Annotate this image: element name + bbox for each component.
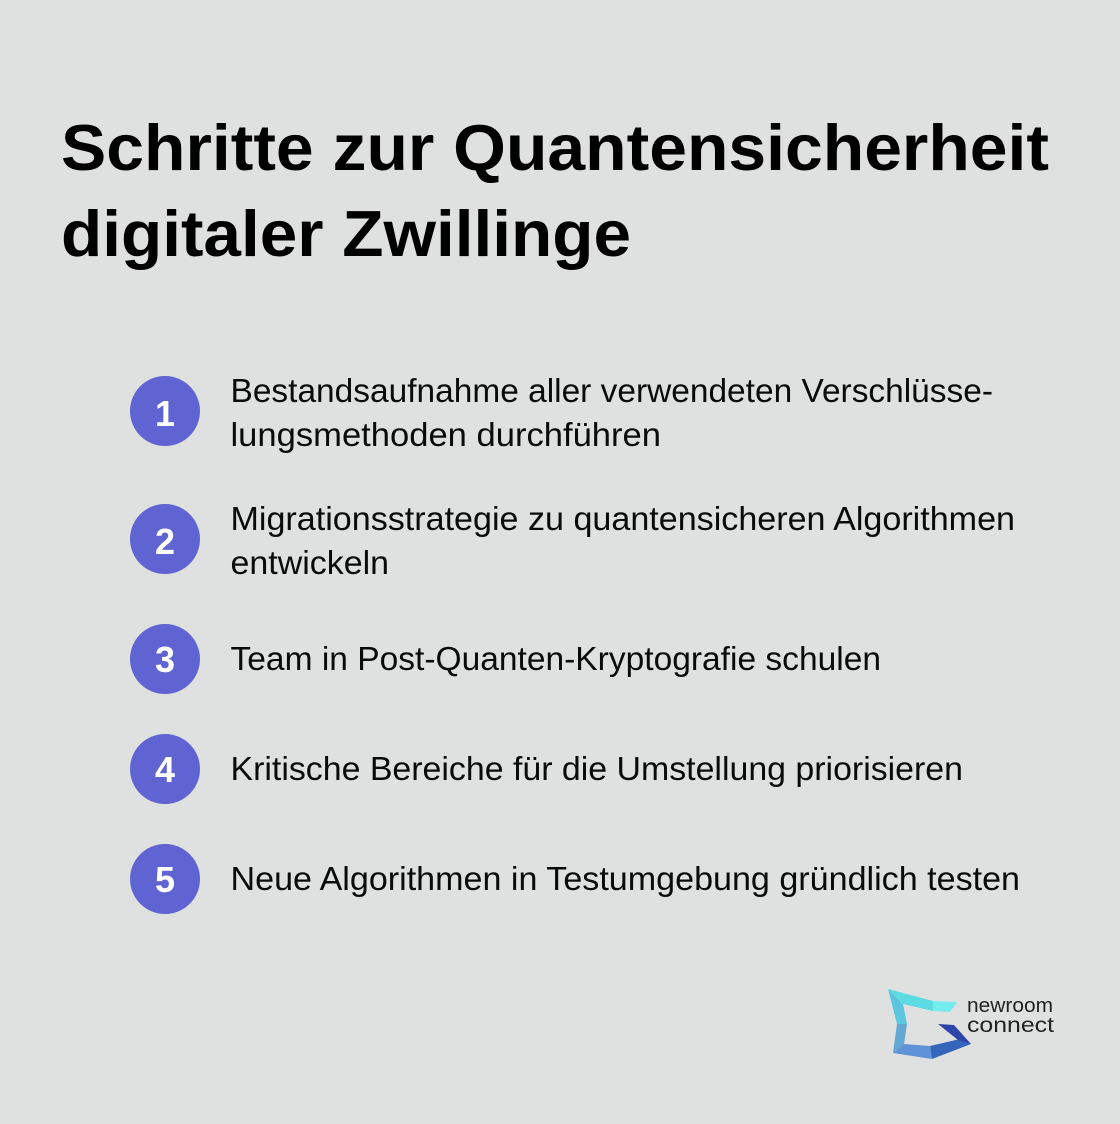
logo mark (888, 989, 971, 1059)
title (61, 111, 1049, 270)
step 1 text: lungsmethoden durchführen (230, 416, 661, 453)
step 4 badge (130, 734, 200, 804)
step 3 (130, 624, 881, 694)
step 5 (130, 844, 1020, 914)
step 2 text: Migrationsstrategie zu quantensicheren Algorithmen (230, 500, 1015, 537)
title: Schritte zur Quantensicherheit (61, 111, 1049, 184)
step 2 (130, 500, 1015, 581)
step 5 badge (130, 844, 200, 914)
step 4 (130, 734, 963, 804)
step 1 badge (130, 376, 200, 446)
step 3 badge (130, 624, 200, 694)
logo wordmark: newroom (967, 995, 1053, 1017)
step 2 badge (130, 504, 200, 574)
step 3 text: Team in Post-Quanten-Kryptografie schulen (230, 640, 881, 677)
step 2 text (230, 500, 1015, 581)
step 2 badge: 2 (155, 521, 175, 562)
step 3 badge: 3 (155, 639, 175, 680)
step 2 text: entwickeln (230, 544, 389, 581)
step 5 badge: 5 (155, 859, 175, 900)
step 5 text: Neue Algorithmen in Testumgebung gründlich testen (230, 860, 1020, 897)
step 4 badge: 4 (155, 749, 175, 790)
logo wordmark (967, 995, 1054, 1037)
step 1 text: Bestandsaufnahme aller verwendeten Verschlüsse- (230, 372, 993, 409)
step 1 badge: 1 (155, 393, 175, 434)
step 1 text (230, 372, 993, 453)
logo wordmark: connect (967, 1013, 1054, 1037)
title: digitaler Zwillinge (61, 197, 631, 270)
step 1 (130, 372, 993, 453)
logo: newroom connect (888, 989, 1054, 1059)
step 4 text: Kritische Bereiche für die Umstellung priorisieren (230, 750, 963, 787)
